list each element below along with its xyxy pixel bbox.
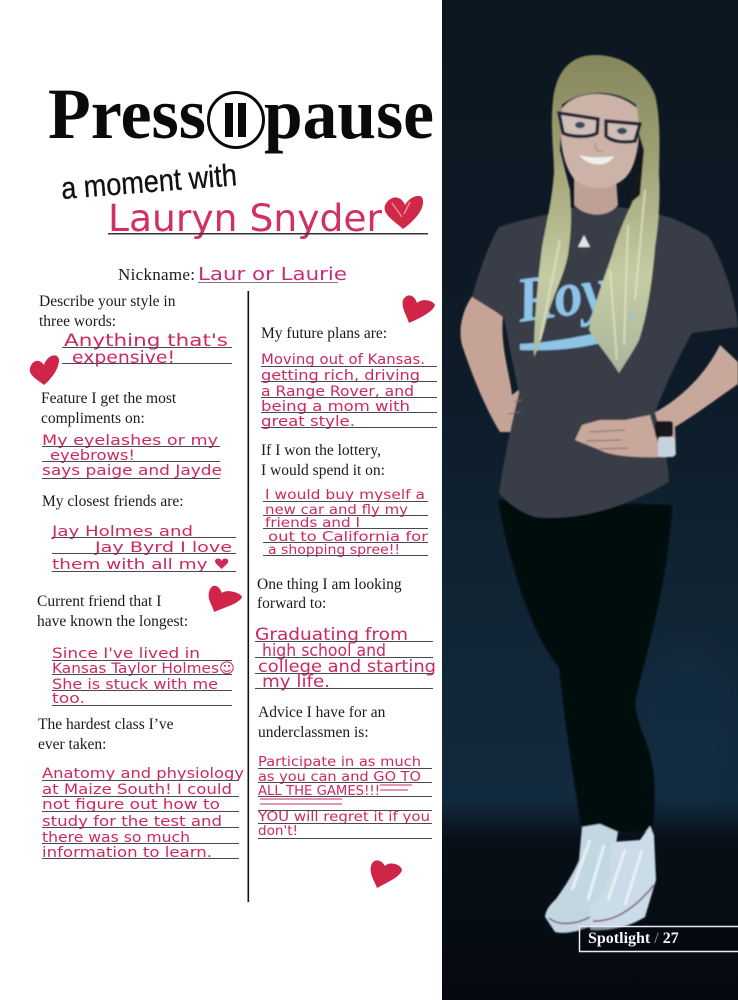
glasses [559, 113, 640, 142]
right arm and hand [575, 345, 738, 457]
question: style: Anything that's [64, 331, 228, 351]
question: feature: says paige and Jayde [42, 463, 222, 479]
question: feature: compliments on: [41, 410, 145, 427]
question: advice: don't! [258, 824, 298, 839]
question: looking forward: high school and [262, 641, 386, 661]
question: longest friend: have known the longest: [37, 613, 188, 630]
question: future plans: great style. [261, 414, 355, 430]
question: lottery: I would spend it on: [261, 462, 385, 479]
question: hardest class [38, 716, 244, 861]
question: hardest class: information to learn. [42, 845, 212, 861]
question: longest friend: too. [52, 691, 85, 707]
question: style: Describe your style in [39, 293, 176, 310]
question: advice: ALL THE GAMES!!! [258, 784, 380, 799]
question: feature [41, 390, 222, 479]
question: hardest class: there was so much [42, 830, 190, 846]
question: looking forward: forward to: [257, 595, 326, 612]
question: hardest class: Anatomy and physiology [42, 766, 244, 782]
face [561, 94, 639, 188]
question: longest friend: Kansas Taylor Holmes☺ [52, 661, 235, 677]
hand over shirt [575, 415, 662, 457]
question: lottery: I would buy myself a [265, 488, 425, 503]
icon: heart left margin [30, 355, 59, 385]
question: looking forward [255, 576, 436, 692]
nose [595, 143, 603, 151]
question: lottery: new car and fly my [265, 503, 408, 518]
leggings [498, 500, 672, 832]
question: hardest class: study for the test and [42, 814, 222, 830]
column divider [248, 291, 249, 902]
question: feature: eyebrows! [50, 448, 135, 464]
question: looking forward: One thing I am looking [257, 576, 402, 593]
question: longest friend [37, 593, 235, 707]
title: Press pause: pause [264, 74, 434, 154]
question: future plans: My future plans are: [261, 325, 387, 342]
panel: photo of Lauryn Snyder [442, 0, 738, 1000]
question: advice: underclassmen is: [258, 724, 369, 741]
Royals logo: Roya [511, 249, 639, 336]
question: looking forward: Graduating from [255, 625, 408, 645]
question: longest friend: Current friend that I [37, 593, 161, 610]
question: future plans: getting rich, driving [261, 368, 420, 384]
title: Press pause: Press [48, 74, 206, 154]
question: lottery: friends and I [265, 516, 360, 531]
left arm [460, 295, 522, 432]
subtitle: a moment with: a moment with [60, 157, 238, 206]
question: looking forward: my life. [262, 672, 330, 692]
question: hardest class: not figure out how to [42, 797, 220, 813]
question: hardest class: The hardest class I’ve [38, 716, 174, 733]
question: advice: Advice I have for an [258, 704, 386, 721]
question: hardest class: ever taken: [38, 736, 106, 753]
fingers [508, 400, 628, 449]
t-shirt [472, 207, 738, 518]
name: Lauryn Snyder: Lauryn Snyder [108, 197, 383, 240]
question: longest friend: She is stuck with me [52, 677, 218, 693]
question: closest friends: Jay Holmes and [51, 524, 193, 540]
icon: heart middle [209, 586, 242, 612]
question: future plans: being a mom with [261, 399, 410, 415]
question: lottery [261, 442, 429, 558]
label: Spotlight page number: Spotlight / 27 [588, 930, 679, 947]
question: closest friends: Jay Byrd I love [94, 540, 232, 556]
question: advice: Participate in as much [258, 755, 421, 770]
question: hardest class: at Maize South! I could [42, 782, 232, 798]
question: future plans [261, 325, 437, 430]
question: advice: YOU will regret it if you [257, 810, 430, 825]
question: lottery: If I won the lottery, [261, 442, 381, 459]
eyes [575, 122, 627, 134]
question: future plans: Moving out of Kansas. [261, 352, 425, 368]
question: longest friend: Since I've lived in [52, 646, 200, 662]
smile [579, 155, 614, 164]
field: nickname: Laur or Laurie [198, 264, 347, 285]
field: nickname [118, 264, 347, 285]
smartwatch [655, 421, 675, 457]
question: advice: as you can and GO TO [258, 770, 421, 785]
logo letters showing beside hair: s [624, 301, 638, 328]
icon: heart beside name [385, 196, 423, 229]
neck [574, 178, 618, 215]
question: lottery: out to California for [268, 530, 429, 545]
question: style: expensive! [72, 348, 175, 368]
icon: heart bottom [371, 860, 402, 888]
question: style [39, 293, 232, 368]
question: closest friends [42, 493, 236, 573]
question: closest friends: them with all my ♥ [52, 557, 230, 573]
panel: right column [255, 295, 437, 888]
question: style: three words: [39, 313, 116, 330]
question: feature: Feature I get the most [41, 390, 177, 407]
panel: left column [30, 293, 244, 861]
question: looking forward: college and starting [258, 657, 436, 677]
question: closest friends: My closest friends are: [42, 493, 184, 510]
question: future plans: a Range Rover, and [261, 384, 414, 400]
question: lottery: a shopping spree!! [268, 543, 400, 558]
long blonde hair [534, 55, 660, 373]
icon: heart top right [403, 295, 435, 323]
question: feature: My eyelashes or my [42, 433, 219, 449]
title: Press pause [48, 74, 434, 154]
jersey logo [578, 235, 590, 247]
field: nickname: Nickname: [118, 265, 195, 284]
label: Spotlight page number [580, 926, 738, 952]
question: advice [257, 704, 432, 839]
hair shadow beside face [628, 130, 644, 205]
sneakers [545, 824, 656, 933]
